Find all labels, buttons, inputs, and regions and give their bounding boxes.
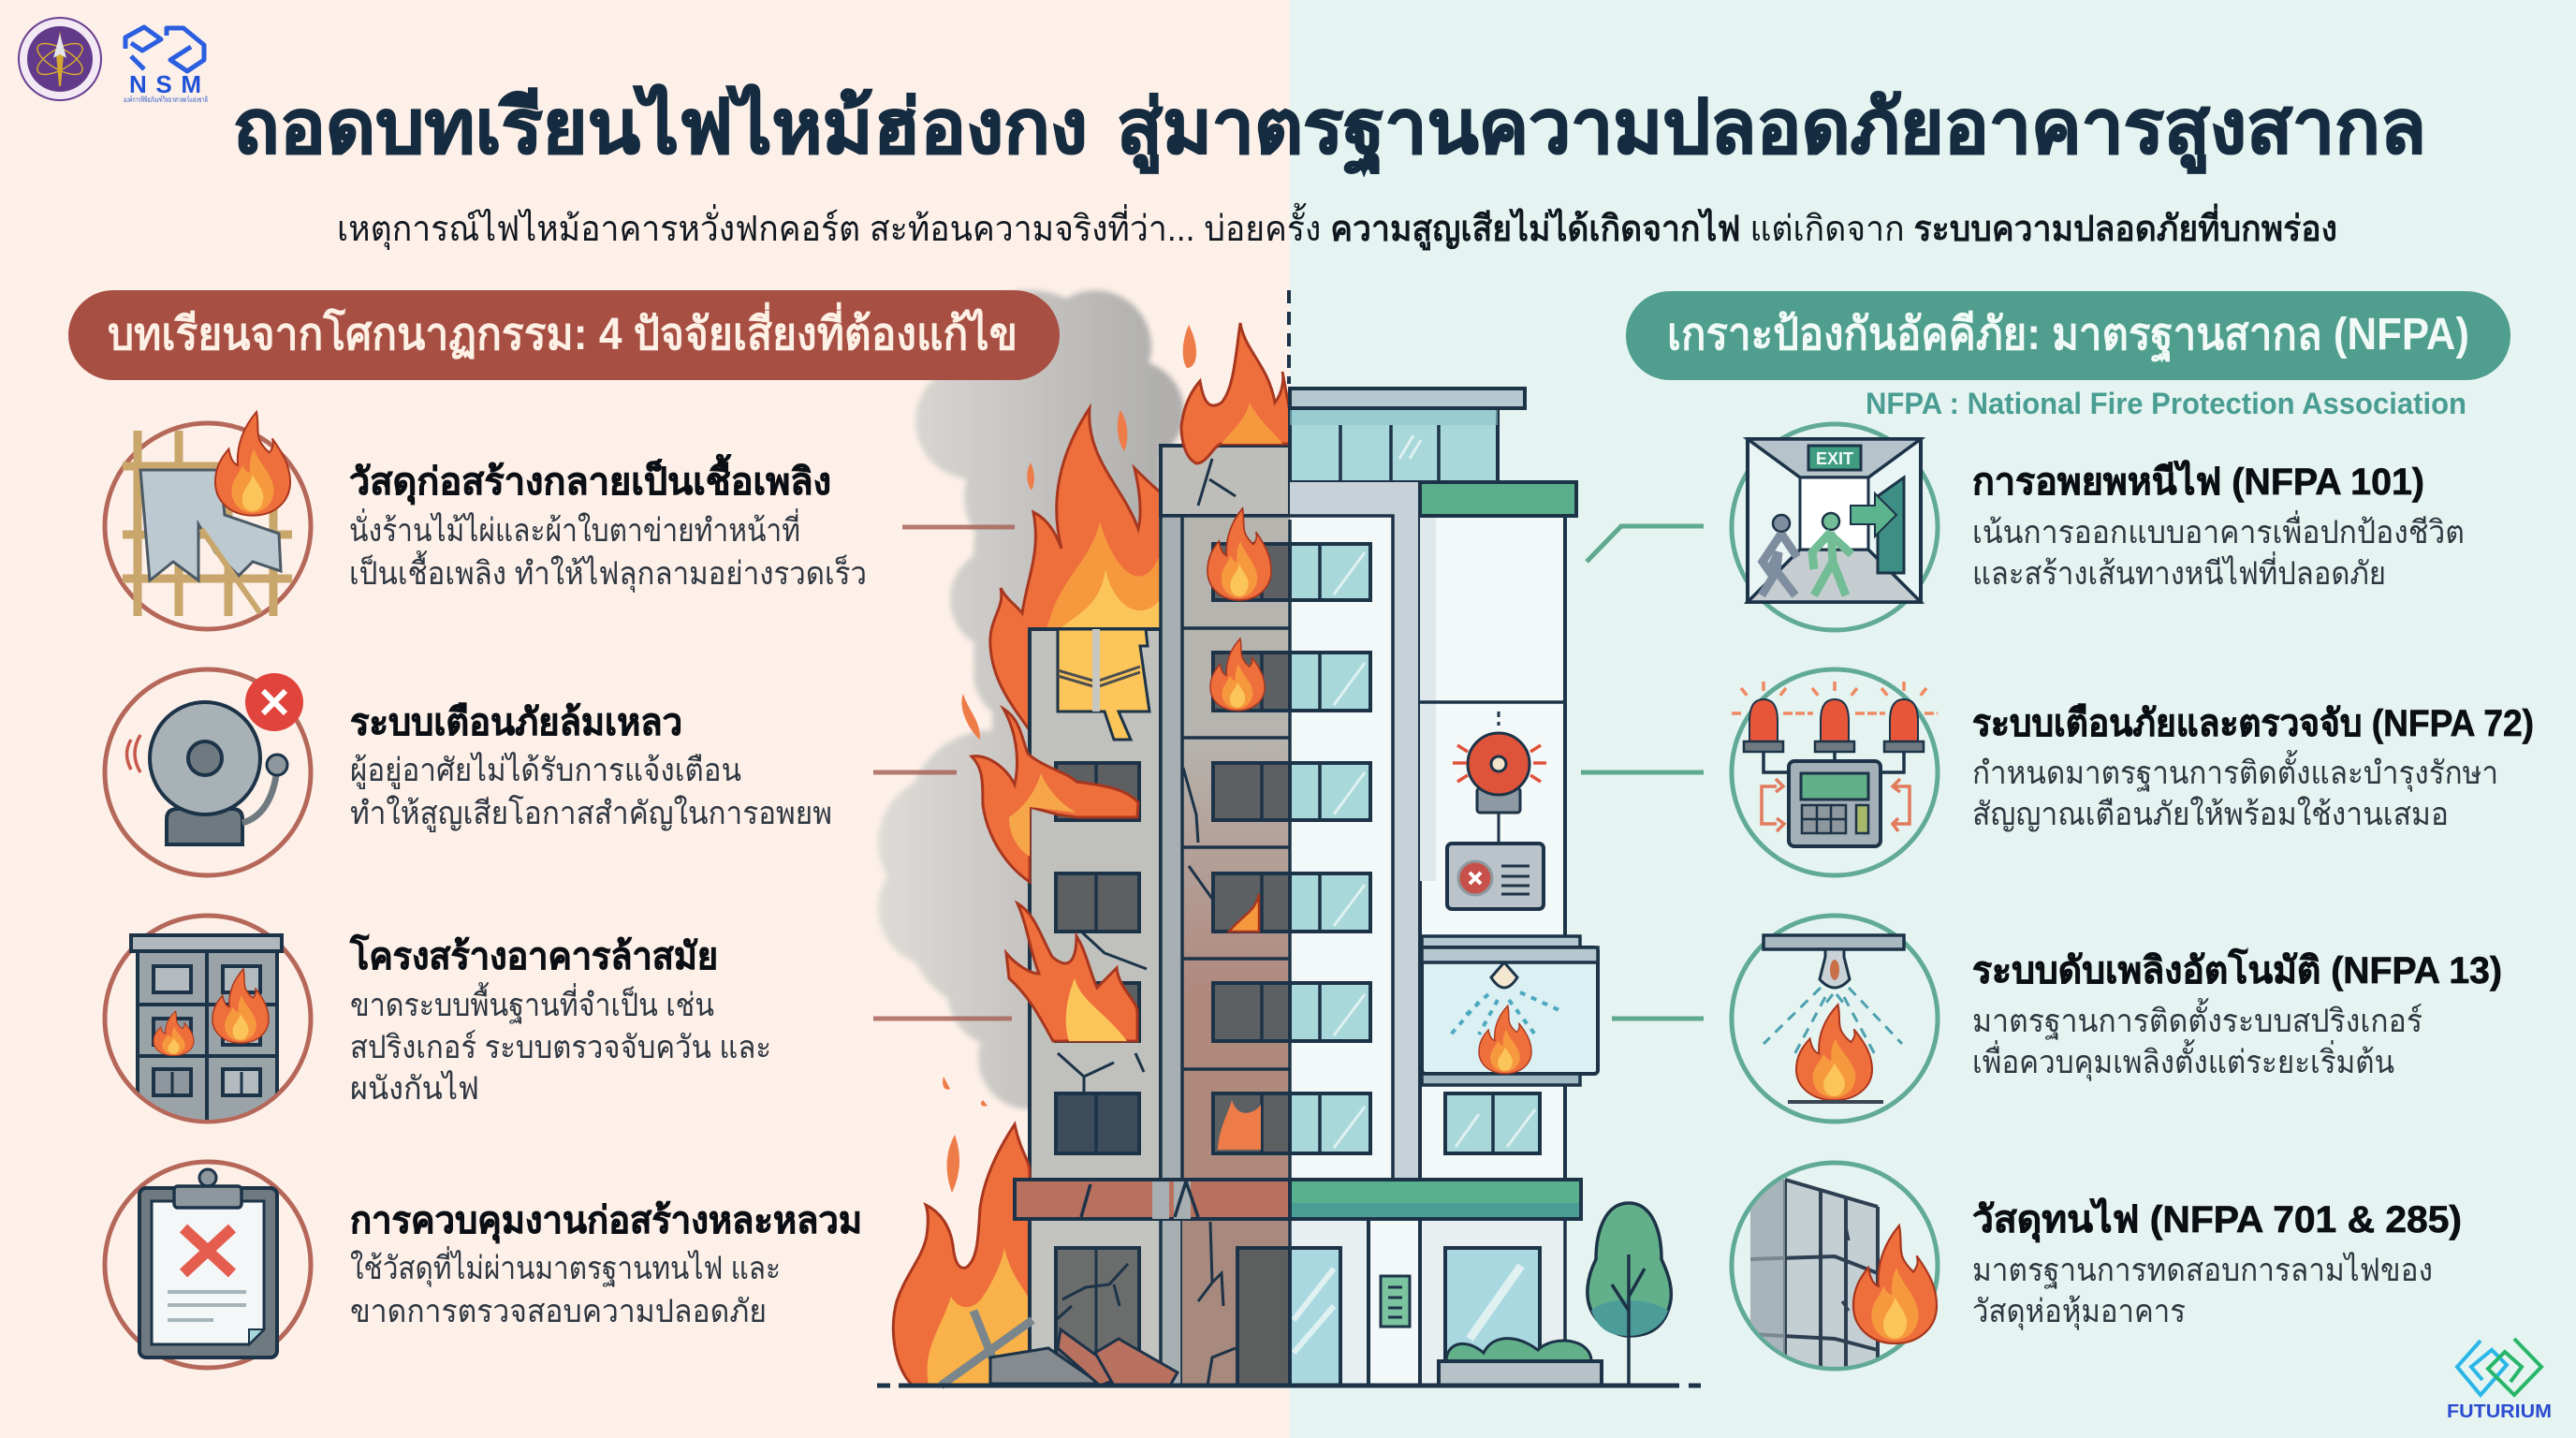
text: standard 3: เพื่อควบคุมเพลิงตั้งแต่ระยะเริ่มต้น <box>1972 1039 2394 1081</box>
floor band: damaged <box>1015 1180 1290 1219</box>
upper tower block <box>1161 446 1290 516</box>
text: risk 2: ทำให้สูญเสียโอกาสสำคัญในการอพยพ <box>350 795 832 832</box>
dark windows row (left side of the same windows) <box>1213 544 1290 1153</box>
connector lines: left <box>873 527 1015 1019</box>
centre dashed divider <box>1287 290 1291 384</box>
floor lines <box>1182 516 1290 1069</box>
main walls <box>1290 482 1420 1180</box>
text: risk 3 <box>349 934 771 1107</box>
text: standard 2: กำหนดมาตรฐานการติดตั้งและบำรุงรักษา <box>1972 750 2498 792</box>
rubble <box>941 1311 1178 1386</box>
text: standard 2: สัญญาณเตือนภัยให้พร้อมใช้งานเสมอ <box>1972 796 2449 832</box>
subtitle: เหตุการณ์ไฟไหม้อาคารหวั่งฟกคอร์ต สะท้อนความจริงที่ว่า... บ่อยครั้ง ความสูญเสียไม่ได้เกิดจากไฟ แต่เกิดจาก ระบบความปลอดภัยที่บกพร่อง <box>337 202 2337 251</box>
windows row <box>1290 544 1370 1153</box>
icon: fire exit <box>1732 424 1938 630</box>
text: standard 3 <box>1972 948 2502 1081</box>
text: risk 1: นั่งร้านไม้ไผ่และผ้าใบตาข่ายทำหน้าที่ <box>349 508 800 549</box>
big flame behind building <box>990 408 1165 730</box>
text: risk 3: สปริงเกอร์ ระบบตรวจจับควัน และ <box>350 1030 771 1065</box>
text: standard 4: มาตรฐานการทดสอบการลามไฟของ <box>1972 1252 2433 1289</box>
icon: fire exit: EXIT <box>1816 449 1853 468</box>
text: risk 2: ผู้อยู่อาศัยไม่ได้รับการแจ้งเตือน <box>350 752 741 789</box>
pill heading: lessons <box>68 290 1060 380</box>
text: standard 2 <box>1972 703 2534 832</box>
text: risk 4: ใช้วัสดุที่ไม่ผ่านมาตรฐานทนไฟ และ <box>350 1246 781 1287</box>
logo: Futurium: FUTURIUM <box>2447 1401 2552 1422</box>
third flame <box>1006 903 1137 1041</box>
bottom flame <box>893 1124 1030 1386</box>
cracks <box>1058 459 1236 1093</box>
icon: alarm and detection panel <box>1732 669 1938 875</box>
window flames <box>1208 508 1271 1150</box>
icon: outdated building <box>105 916 311 1129</box>
NFPA note: NFPA : National Fire Protection Association <box>1866 387 2466 420</box>
text: risk 3: โครงสร้างอาคารล้าสมัย <box>349 934 718 977</box>
tree <box>1588 1203 1671 1386</box>
text: standard 1: เน้นการออกแบบอาคารเพื่อปกป้องชีวิต <box>1972 510 2465 550</box>
logo: institute seal <box>19 18 101 100</box>
lower right window <box>1445 1093 1540 1153</box>
building: safe half <box>1213 389 1598 1180</box>
text: standard 4: วัสดุห่อหุ้มอาคาร <box>1972 1294 2186 1330</box>
penthouse <box>1290 408 1498 482</box>
icon: failed alarm bell <box>105 669 311 875</box>
alarm control panel on wall <box>1447 844 1544 909</box>
second flame <box>972 709 1138 882</box>
smoke cloud <box>878 290 1184 1109</box>
text: risk 4: ขาดการตรวจสอบความปลอดภัย <box>350 1294 767 1329</box>
icon: burning scaffold <box>105 412 311 629</box>
text: risk 4 <box>350 1200 862 1329</box>
floor band: safe <box>1290 1180 1581 1219</box>
text: standard 1: การอพยพหนีไฟ (NFPA 101) <box>1972 460 2424 503</box>
text: risk 3: ผนังกันไฟ <box>350 1070 479 1107</box>
text: risk 1 <box>349 454 867 593</box>
text: risk 2 <box>350 702 832 832</box>
text: risk 3: ขาดระบบพื้นฐานที่จำเป็น เช่น <box>350 982 714 1024</box>
logo: NSM: NSM <box>129 70 201 98</box>
text: risk 1: วัสดุก่อสร้างกลายเป็นเชื้อเพลิง <box>349 454 831 506</box>
text: standard 1: และสร้างเส้นทางหนีไฟที่ปลอดภัย <box>1972 551 2386 592</box>
roof slab <box>1290 389 1525 408</box>
pill heading: prevention <box>1626 291 2510 380</box>
title: สู่มาตรฐานความปลอดภัยอาคารสูงสากล <box>1117 85 2426 176</box>
logo: Futurium <box>2447 1339 2552 1422</box>
text: standard 4 <box>1972 1197 2462 1330</box>
droplets of fire <box>943 325 1196 1193</box>
text: risk 2: ระบบเตือนภัยล้มเหลว <box>350 702 682 743</box>
main wall <box>1182 516 1290 1180</box>
ground line <box>877 1384 1701 1387</box>
text: risk 1: เป็นเชื้อเพลิง ทำให้ไฟลุกลามอย่างรวดเร็ว <box>349 550 867 593</box>
sprinkler room <box>1422 936 1598 1085</box>
pill heading: lessons: บทเรียนจากโศกนาฏกรรม: 4 ปัจจัยเสี่ยงที่ต้องแก้ไข <box>108 301 1017 360</box>
icon: failed clipboard <box>105 1162 311 1368</box>
building: ground floor <box>1015 520 1602 1386</box>
title: ถอดบทเรียนไฟไหม้ฮ่องกง <box>233 83 1088 169</box>
text: standard 4: วัสดุทนไฟ (NFPA 701 & 285) <box>1972 1197 2462 1243</box>
logo: NSM <box>124 27 208 104</box>
pill heading: prevention: เกราะป้องกันอัคคีภัย: มาตรฐานสากล (NFPA) <box>1667 310 2469 363</box>
text: standard 3: มาตรฐานการติดตั้งระบบสปริงเกอร์ <box>1972 998 2422 1040</box>
building: damaged half <box>943 325 1290 1219</box>
text: standard 2: ระบบเตือนภัยและตรวจจับ (NFPA 72) <box>1972 703 2534 744</box>
text: risk 4: การควบคุมงานก่อสร้างหละหลวม <box>350 1200 862 1244</box>
logo: NSM: องค์การพิพิธภัณฑ์วิทยาศาสตร์แห่งชาติ <box>124 95 208 104</box>
left wing yellow window <box>1058 629 1149 740</box>
connector lines: right <box>1581 526 1704 1019</box>
title <box>233 83 2426 176</box>
text: standard 1 <box>1972 460 2465 592</box>
text: standard 3: ระบบดับเพลิงอัตโนมัติ (NFPA 13) <box>1972 948 2502 991</box>
left wing windows <box>1056 763 1139 820</box>
background: left half <box>0 0 1290 1438</box>
building: top flame <box>1181 323 1290 463</box>
icon: fire-rated cladding <box>1732 1163 1938 1376</box>
alarm bell on wall <box>1453 712 1546 844</box>
icon: sprinkler <box>1732 916 1938 1122</box>
green roof band <box>1420 482 1576 516</box>
background: right half <box>1290 0 2576 1438</box>
planter and bush <box>1446 1339 1591 1361</box>
